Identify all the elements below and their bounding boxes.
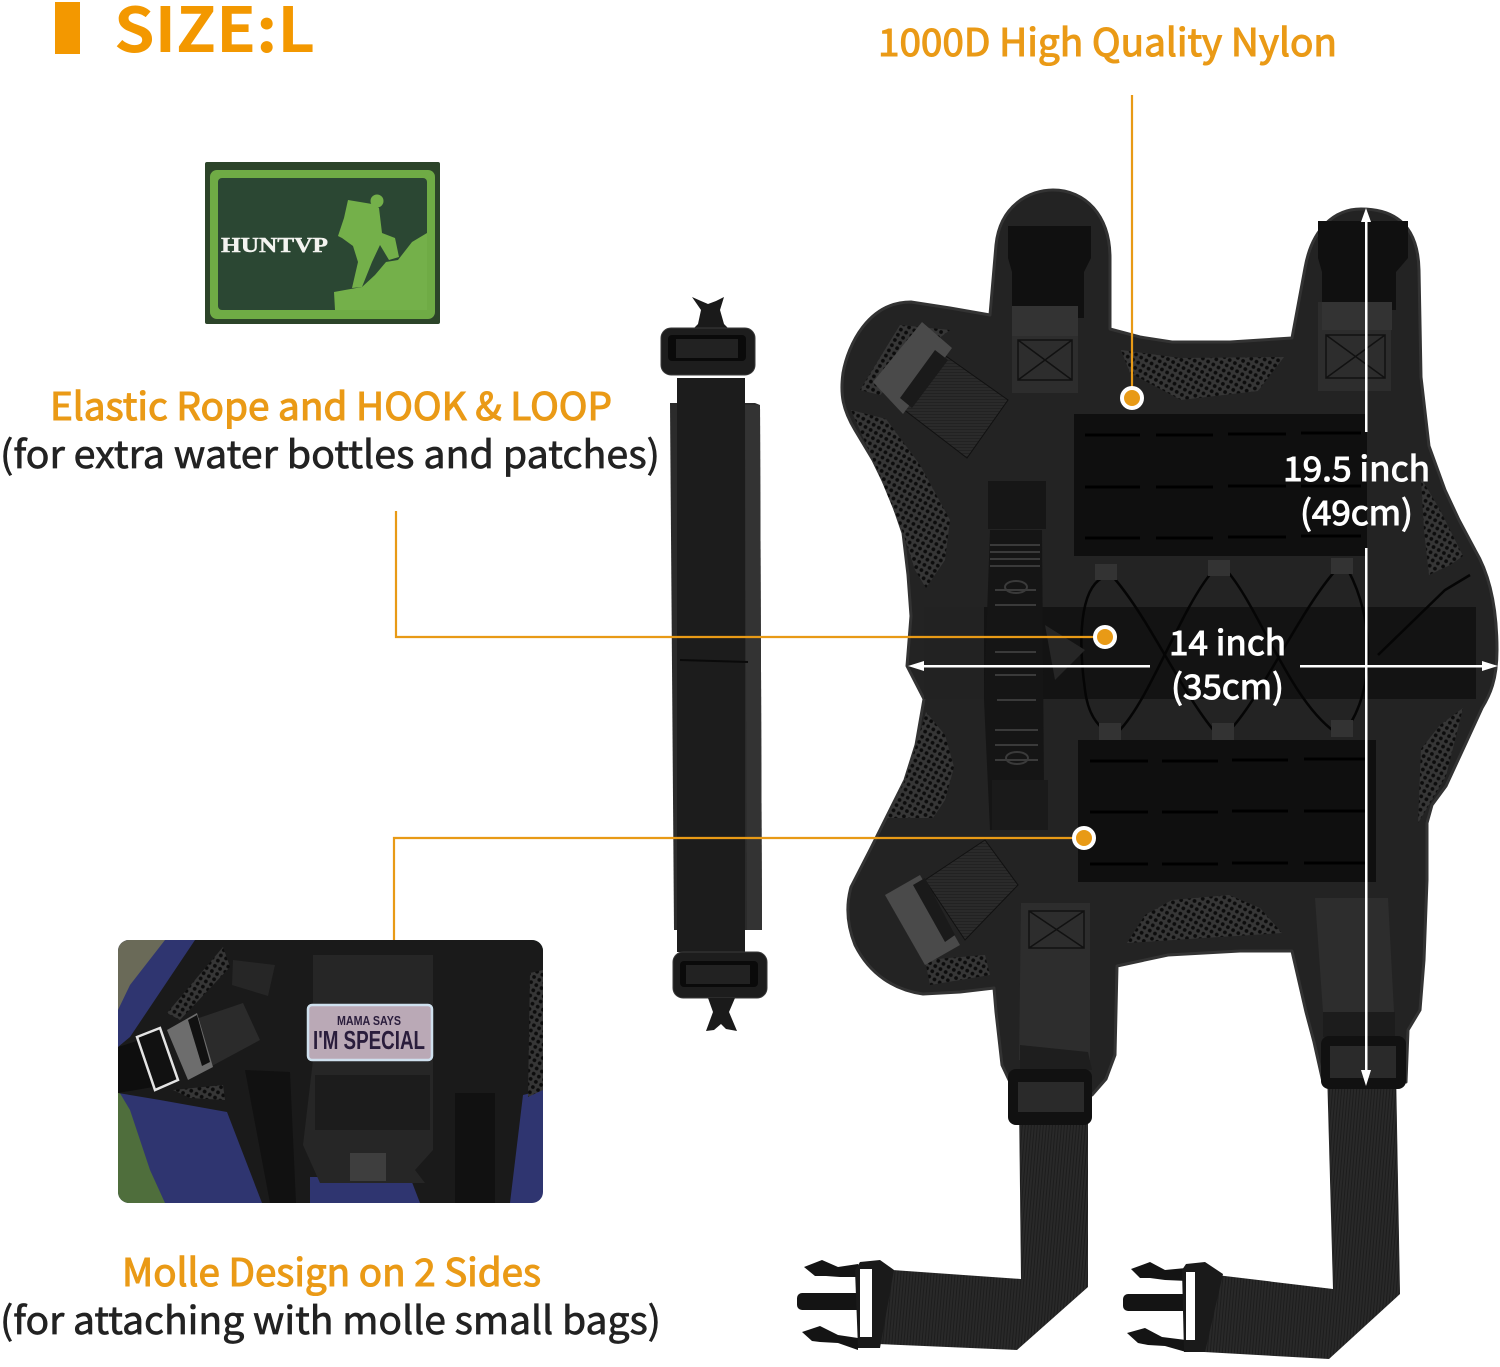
belt bottom buckle	[673, 952, 767, 1031]
photo: embroidered patch: MAMA SAYS	[337, 1013, 401, 1028]
elastic belt accessory	[661, 297, 767, 1031]
harness: left leg strap	[878, 1100, 1088, 1350]
photo: harness on dog	[118, 940, 543, 1203]
label: nylon: 1000D High Quality Nylon	[878, 12, 1337, 67]
measurement text: width: 14 inch	[1169, 616, 1286, 665]
label: molle: Molle Design on 2 Sides	[122, 1242, 541, 1297]
photo: webbing and metal buckle	[118, 1003, 260, 1093]
buckle: left strap end	[797, 1260, 894, 1350]
harness: D-ring	[1045, 625, 1085, 680]
text: molle description: (for attaching with molle small bags)	[0, 1290, 661, 1345]
callout line: nylon	[1122, 95, 1142, 408]
harness: elastic cords	[1081, 570, 1470, 732]
harness: lower shoulder webbing and buckle	[885, 840, 1018, 965]
photo: embroidered patch: I'M SPECIAL	[313, 1025, 425, 1055]
patch: HUNTVP	[205, 162, 440, 324]
belt top buckle	[661, 297, 755, 375]
harness: bottom molle panel	[1078, 740, 1376, 882]
harness: cord tabs	[1095, 558, 1353, 740]
harness: right leg strap	[1204, 1070, 1400, 1359]
label: elastic rope: Elastic Rope and HOOK & LOOP	[50, 376, 612, 431]
harness: top left strap	[1008, 226, 1091, 393]
icon: size marker bar	[55, 2, 80, 54]
harness: upper shoulder webbing and buckle	[873, 322, 1008, 458]
harness: right slider	[1321, 1012, 1406, 1089]
harness: top right strap	[1318, 221, 1408, 391]
photo: mesh panels	[167, 947, 543, 1100]
measurement text: height: (49cm)	[1300, 486, 1413, 535]
measurement text: height	[1283, 442, 1430, 535]
text: elastic rope description: (for extra water bottles and patches)	[0, 424, 660, 479]
photo: embroidered patch	[308, 1005, 432, 1060]
measurement text: height: 19.5 inch	[1283, 442, 1430, 491]
measurement: width arrow	[908, 661, 1498, 671]
callout line: elastic rope	[396, 511, 1115, 647]
harness: middle band	[924, 607, 1476, 699]
harness	[797, 190, 1497, 1359]
buckle: right strap end	[1123, 1262, 1223, 1352]
measurement: height arrow	[1361, 208, 1371, 1086]
callout line: molle	[394, 828, 1094, 940]
harness: top molle panel	[1074, 414, 1367, 556]
harness: left slider	[1008, 1045, 1092, 1125]
harness: grab handle	[984, 481, 1048, 830]
patch: climber silhouette	[334, 194, 427, 310]
photo: side straps	[232, 960, 495, 1203]
harness: lower webbing right	[1315, 898, 1394, 1012]
harness: mesh zones	[851, 325, 1463, 985]
patch: brand text: HUNTVP	[221, 233, 328, 257]
measurement text: width	[1169, 616, 1286, 709]
harness: main body	[842, 190, 1497, 1095]
measurement text: width: (35cm)	[1171, 660, 1284, 709]
photo: molle pouch	[303, 955, 433, 1183]
harness: lower webbing left	[1019, 903, 1090, 1060]
